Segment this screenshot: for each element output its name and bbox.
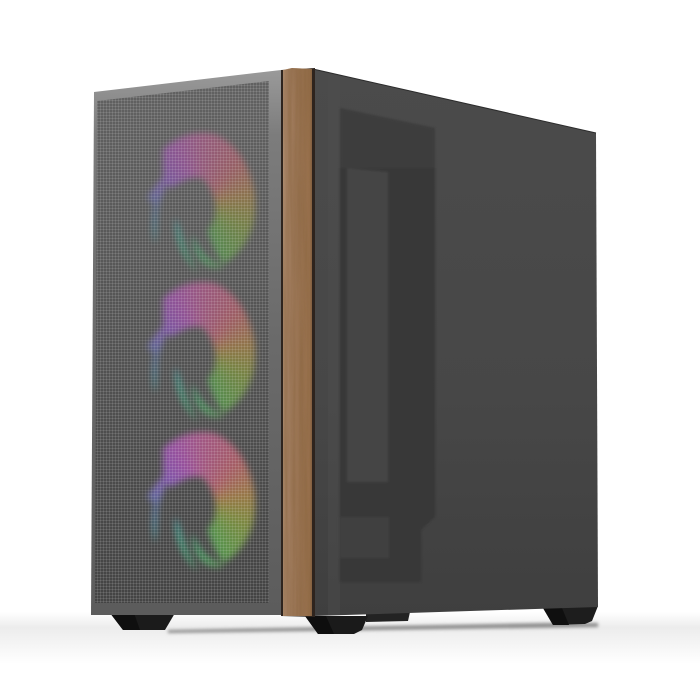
foot: front center — [305, 612, 410, 634]
foot: front left — [110, 613, 175, 630]
tempered glass window — [339, 108, 435, 582]
left frame strip — [328, 74, 340, 615]
fan: top — [146, 130, 258, 270]
inner component — [347, 168, 388, 482]
fan: bottom — [144, 428, 258, 570]
fan: middle — [146, 278, 258, 420]
foot: rear right — [543, 606, 598, 625]
front mesh panel with RGB fans — [91, 70, 281, 615]
mesh grille — [95, 81, 269, 603]
lower component — [339, 517, 389, 558]
